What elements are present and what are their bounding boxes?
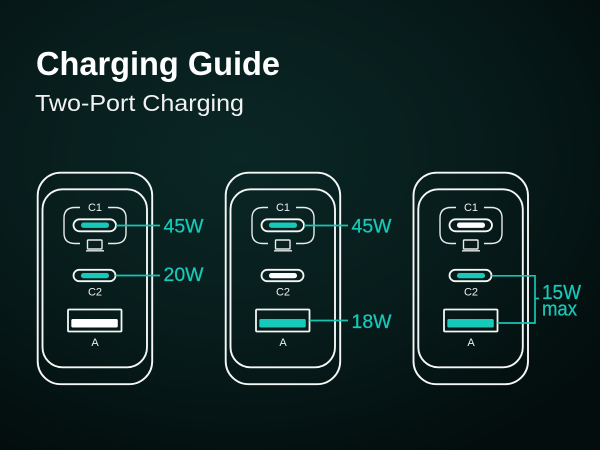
C1 active bbox=[81, 222, 109, 228]
C1 bracket bbox=[64, 208, 126, 244]
C2 port bbox=[74, 270, 116, 281]
charger 1 bbox=[38, 173, 204, 384]
charger 3 bbox=[414, 173, 581, 384]
charger body bbox=[38, 173, 152, 384]
A label: A bbox=[279, 337, 287, 349]
charger 2 bbox=[226, 173, 392, 384]
icon: laptop bbox=[86, 240, 104, 251]
C2 idle bbox=[269, 273, 297, 278]
C1 port bbox=[74, 219, 116, 231]
C2 label: C2 bbox=[464, 286, 478, 298]
C2 label: C2 bbox=[276, 286, 290, 298]
USB-A port bbox=[256, 310, 310, 332]
C1 port bbox=[262, 219, 304, 231]
18W: 18W bbox=[352, 312, 392, 333]
C2 active bbox=[81, 273, 109, 278]
leader 20W bbox=[116, 274, 160, 276]
bracket connector bbox=[492, 276, 539, 323]
USB-A active bbox=[259, 319, 306, 328]
C1 label: C1 bbox=[88, 202, 102, 214]
leader 45W bbox=[304, 224, 348, 226]
C2 port bbox=[450, 270, 492, 281]
leader 18W bbox=[310, 320, 348, 322]
leader 45W bbox=[116, 224, 160, 226]
C1 port bbox=[450, 219, 492, 231]
subtitle: Two-Port Charging bbox=[35, 90, 244, 116]
USB-A port bbox=[444, 310, 498, 332]
charger body bbox=[414, 173, 528, 384]
45W: 45W bbox=[164, 216, 204, 238]
C1 idle bbox=[457, 222, 485, 228]
C1 bracket bbox=[252, 208, 314, 244]
USB-A port bbox=[68, 310, 122, 332]
max: max bbox=[542, 298, 577, 320]
45W: 45W bbox=[352, 216, 392, 238]
C1 label: C1 bbox=[276, 202, 290, 214]
faceplate bbox=[418, 189, 523, 367]
charger body bbox=[226, 173, 340, 384]
C2 active bbox=[457, 273, 485, 278]
A label: A bbox=[91, 337, 99, 349]
icon: laptop bbox=[274, 240, 292, 251]
C2 port bbox=[262, 270, 304, 281]
USB-A active bbox=[447, 319, 494, 328]
C1 label: C1 bbox=[464, 202, 478, 214]
C1 bracket bbox=[440, 208, 502, 244]
faceplate bbox=[230, 189, 335, 367]
icon: laptop bbox=[462, 240, 480, 251]
title: Charging Guide bbox=[36, 45, 280, 82]
C2 label: C2 bbox=[88, 286, 102, 298]
faceplate bbox=[42, 189, 147, 367]
15W: 15W bbox=[542, 282, 581, 304]
20W: 20W bbox=[164, 265, 204, 286]
C1 active bbox=[269, 222, 297, 228]
USB-A idle bbox=[71, 319, 118, 328]
A label: A bbox=[467, 337, 475, 349]
